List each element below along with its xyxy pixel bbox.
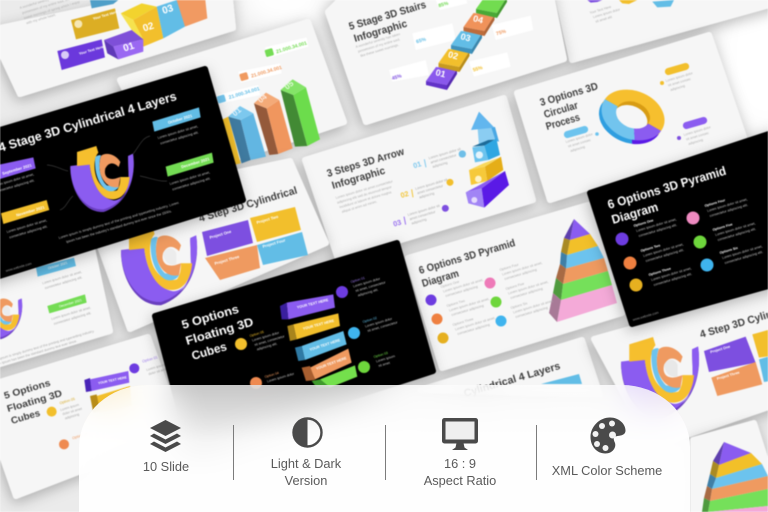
step markers: adipiscing	[411, 217, 427, 226]
options: Options Five	[712, 222, 733, 232]
title: Cubes	[190, 339, 229, 363]
chart value labels: 21.000.34.001	[228, 86, 261, 101]
title: Floating 3D	[6, 388, 64, 415]
cylinder graphic	[621, 337, 699, 418]
step markers: adipiscing	[419, 191, 435, 200]
description: Lorem ipsum dolor sit amet consectetur	[335, 179, 394, 200]
cylinder graphic	[0, 293, 22, 339]
options: Lorem ipsum dolor sit amet,	[636, 217, 677, 233]
label: Light & Dark Version: Version	[285, 473, 327, 488]
icon: palette	[590, 418, 626, 454]
options: Options One	[440, 280, 460, 289]
project boxes	[704, 329, 768, 396]
title	[325, 146, 406, 192]
cubes and options: YOUR TEXT HERE	[98, 375, 128, 385]
title: Circular	[542, 99, 579, 121]
option callouts: adipiscing	[670, 84, 686, 92]
cubes and options	[47, 355, 168, 449]
title: Infographic	[330, 165, 387, 192]
date labels: December 2021	[181, 156, 211, 169]
options: Lorem ipsum dolor sit amet,	[443, 278, 484, 293]
description: possession of my entire soul,	[358, 37, 401, 53]
project boxes: Project Three	[214, 254, 241, 266]
title: 6 Options 3D Pyramid	[606, 164, 728, 212]
options: Lorem ipsum dolor sit amet,	[455, 316, 496, 331]
date labels: Lorem ipsum dolor sit amet,	[42, 270, 82, 285]
bars: 01	[230, 105, 243, 118]
options: Lorem ipsum dolor sit amet,	[722, 244, 763, 260]
label: 16 : 9 Aspect Ratio: 16 : 9	[444, 456, 476, 471]
step markers: Lorem ipsum dolor sit	[407, 204, 440, 217]
date labels: October 2021	[47, 261, 68, 270]
options: consectetur adipiscing elit.	[638, 223, 678, 238]
stair blocks: 01	[122, 40, 136, 55]
stair blocks	[57, 0, 207, 70]
option markers: Lorem ipsum dolor	[267, 371, 295, 383]
date labels: November 2021	[16, 204, 46, 218]
cylinder graphic	[70, 146, 134, 212]
description: aliqua ut enim ad minim.	[341, 200, 378, 214]
step markers: Lorem ipsum dolor sit	[428, 147, 461, 160]
option markers: Option 02	[362, 316, 377, 324]
stair blocks: 03	[161, 3, 175, 17]
label: 10 Slide: 10 Slide	[143, 459, 189, 474]
slide: 3 steps 3D arrow infographic	[305, 98, 533, 259]
options: consectetur adipiscing	[504, 268, 537, 281]
options: Options Four	[704, 198, 726, 208]
step markers	[392, 147, 466, 229]
option callouts: sit amet consec	[668, 77, 692, 87]
slide: 4 step 3D cylindrical	[85, 161, 326, 329]
options: consectetur adipiscing elit.	[653, 272, 693, 287]
label: 16 : 9 Aspect Ratio: Aspect Ratio	[424, 473, 496, 488]
options: Lorem ipsum dolor sit amet,	[508, 280, 549, 295]
floating cubes: YOUR TEXT HERE	[303, 319, 335, 331]
title: Floating 3D	[184, 315, 255, 348]
stair labels: 65%	[416, 37, 427, 45]
title	[538, 80, 600, 133]
cylinder graphic	[121, 226, 197, 305]
options: Lorem ipsum dolor sit amet,	[707, 197, 748, 213]
project boxes: Project Three	[716, 371, 740, 381]
slide: left cylindrical light	[0, 230, 110, 370]
options: Options Six	[510, 301, 528, 310]
options: Options Four	[499, 262, 520, 272]
footer: www.website.com	[632, 310, 659, 322]
options: consectetur adipiscing	[457, 323, 490, 336]
icon: monitor	[442, 418, 478, 450]
options: Lorem ipsum dolor sit amet,	[715, 221, 756, 237]
slide: 5 stage 3D stair blocks	[0, 0, 233, 94]
stair steps: 02	[447, 49, 459, 62]
cubes and options: dolor sit amet	[148, 367, 168, 376]
options: Options Two	[446, 299, 465, 308]
icon: layers	[150, 420, 181, 452]
cubes and options: dolor sit amet	[62, 407, 82, 416]
title: 5 Options	[3, 378, 52, 402]
step markers: adipiscing	[432, 161, 448, 169]
date labels: consectetur adipiscing elit.	[44, 275, 83, 290]
divider	[385, 425, 386, 480]
step markers: amet consectetur	[430, 153, 458, 165]
title	[347, 0, 428, 45]
slide: 5 options floating 3D cubes light	[0, 337, 182, 496]
floating cubes: YOUR TEXT HERE	[316, 356, 348, 371]
options	[426, 256, 555, 344]
options: Options One	[633, 218, 654, 228]
step markers: amet consectetur	[417, 184, 444, 195]
body text: Lorem ipsum is simply dummy text of the printing and typesetting industry. Lorem	[58, 201, 179, 240]
title: 4 Stage 3D Cylindrical 4 Layers	[0, 89, 178, 155]
connectors	[47, 136, 167, 210]
option markers: Lorem ipsum dolor	[365, 316, 393, 328]
stair steps: 01	[434, 67, 447, 80]
option callouts: sit amet consec	[686, 131, 710, 141]
bars	[220, 79, 320, 165]
options: consectetur adipiscing elit.	[645, 248, 685, 263]
stair blocks: Your Text Here	[78, 45, 104, 56]
bars: 04	[256, 92, 269, 105]
project boxes	[202, 207, 308, 280]
option callouts: Lorem ipsum dolor	[565, 132, 594, 144]
cubes and options: Lorem ipsum	[146, 363, 166, 372]
option callouts: sit amet consec	[568, 138, 592, 148]
title: Cylindrical 4 Layers	[462, 360, 562, 400]
stair steps	[426, 0, 507, 90]
title: Process	[544, 111, 582, 133]
bars: 05	[283, 79, 296, 92]
option callouts	[563, 62, 715, 154]
dark slide: 6 options 3D pyramid diagram	[590, 127, 768, 324]
options: consectetur adipiscing elit.	[724, 250, 764, 265]
options: consectetur adipiscing	[510, 287, 543, 300]
label: Light & Dark Version: Light & Dark	[271, 456, 341, 471]
title: Infographic	[352, 18, 409, 45]
blue label	[541, 374, 582, 384]
pyramid	[549, 219, 617, 322]
label: XML Color Scheme: XML Color Scheme	[552, 463, 662, 478]
floating cubes: YOUR TEXT HERE	[297, 298, 329, 310]
description: A wonderful serenity has taken	[355, 32, 401, 49]
footer: www.website.com	[5, 261, 32, 273]
project boxes: Project Two	[256, 214, 279, 225]
arrow stack	[466, 112, 509, 208]
title: 4 Step 3D Cylindrical	[197, 185, 299, 225]
stair blocks: Your Text Here	[92, 10, 118, 21]
ring chart	[592, 81, 672, 153]
title: 6 Options 3D Pyramid	[417, 237, 517, 277]
project boxes: Project One	[710, 345, 731, 354]
stair blocks: 02	[142, 20, 156, 35]
date labels: September 2021	[2, 162, 33, 176]
stair labels: 55%	[472, 65, 484, 74]
option markers: Option 01	[350, 276, 365, 284]
body text: Lorem ipsum dolor sit amet,	[157, 124, 198, 140]
slide: 5 stage 3D stairs infographic	[328, 0, 564, 122]
title: Cubes	[10, 408, 42, 427]
option markers: adipiscing elit.	[357, 288, 379, 298]
options: Lorem ipsum dolor sit amet,	[643, 242, 684, 258]
option markers: sit amet, consectetur	[254, 334, 286, 347]
title	[417, 237, 517, 290]
step markers: 01	[412, 159, 422, 170]
floating cubes	[280, 294, 357, 388]
options: Options Five	[505, 282, 525, 291]
intro text: with my whole heart.	[26, 13, 57, 25]
option markers: adipiscing elit.	[256, 342, 278, 352]
options: Lorem ipsum dolor sit amet,	[513, 299, 554, 314]
dark slide: 4 stage 3D cylindrical 4 layers	[0, 69, 243, 282]
body text	[0, 124, 212, 246]
slide: cylindrical 4 layers light	[420, 340, 600, 400]
label: 16 : 9 Aspect Ratio	[424, 456, 496, 488]
option markers: sit amet, consectetur	[355, 280, 387, 293]
caption text: sit amet elit	[595, 15, 612, 24]
title: 3 Steps 3D Arrow	[325, 146, 406, 180]
date labels: Lorem ipsum dolor sit amet,	[51, 306, 91, 321]
date labels: December 2021	[58, 298, 82, 309]
title: 3 Options 3D	[538, 80, 600, 109]
description: incididunt ut labore et dolore magna	[339, 190, 392, 209]
stair labels: 75%	[496, 29, 507, 37]
step markers: 02	[399, 189, 410, 200]
option callouts: adipiscing	[570, 145, 586, 153]
date labels: October 2021	[167, 113, 194, 125]
options: consectetur adipiscing elit.	[709, 203, 749, 218]
option markers: Option 04	[264, 371, 279, 379]
date labels	[0, 107, 214, 224]
options: Options Two	[640, 243, 661, 253]
pyramid	[702, 442, 768, 512]
option markers	[235, 270, 399, 389]
slide: 6 options 3D pyramid diagram light	[408, 205, 622, 368]
options: Options Three	[648, 267, 671, 277]
option callouts: adipiscing	[688, 138, 704, 146]
chart value labels	[216, 37, 308, 104]
divider	[536, 425, 537, 480]
option markers: Lorem ipsum dolor	[353, 276, 381, 288]
cubes and options: adipiscing	[64, 412, 80, 420]
project boxes: Project Four	[262, 237, 286, 249]
dark slide: 5 options floating 3D cubes	[155, 243, 433, 450]
step markers: 03	[392, 218, 402, 229]
option markers: Lorem ipsum	[376, 354, 396, 363]
cubes and options: Option 01	[142, 355, 158, 364]
white glow top centre	[235, 0, 335, 30]
options: Options Six	[719, 246, 738, 255]
title: Diagram	[610, 200, 660, 227]
label: Light & Dark Version	[271, 456, 342, 488]
step markers: Lorem ipsum dolor sit	[415, 178, 448, 191]
option callouts: Lorem ipsum dolor	[665, 71, 694, 83]
body text: consectetur adipiscing elit.	[172, 176, 211, 191]
option markers: Option 03	[373, 351, 388, 359]
slide: 3 options 3D circular process	[517, 35, 744, 200]
intro text: sweet mornings of spring which I enjoy	[23, 0, 81, 20]
caption text: Lorem ipsum dolor	[592, 7, 621, 19]
project boxes: Project One	[209, 229, 233, 240]
options: Lorem ipsum dolor sit amet,	[651, 266, 692, 282]
options: consectetur adipiscing	[451, 304, 484, 317]
date labels	[0, 258, 96, 368]
feature panel	[79, 385, 690, 512]
slide: 3D bar chart	[120, 22, 344, 180]
options: Options Three	[452, 317, 474, 327]
options: consectetur adipiscing elit.	[717, 227, 757, 242]
option markers: sit amet	[378, 361, 390, 368]
body text: Lorem ipsum dolor sit amet,	[6, 218, 47, 234]
chart value labels: 21.000.34.001	[251, 65, 283, 80]
slide: top right partial	[554, 0, 768, 60]
stair steps: 04	[472, 13, 484, 26]
option callouts: Lorem ipsum dolor	[683, 125, 712, 137]
body text: Lorem ipsum dolor sit amet,	[169, 170, 210, 186]
cubes and options: Option 04	[72, 432, 88, 440]
option markers: sit amet, consectetur	[367, 320, 399, 333]
title	[180, 302, 255, 363]
body text: Ipsum has been the industry's standard dummy text ever since the 1500s.	[66, 209, 172, 244]
cubes and options: Lorem ipsum	[60, 403, 80, 412]
description: like these sweet mornings.	[360, 43, 399, 58]
stair steps: 03	[459, 31, 472, 44]
stair labels	[389, 0, 533, 82]
white glow top right	[710, 0, 768, 140]
slide: pyramid bottom right	[693, 423, 768, 512]
stair labels: 45%	[391, 73, 403, 82]
floating cubes: YOUR TEXT HERE	[309, 338, 341, 352]
options	[616, 192, 765, 292]
options: Lorem ipsum dolor sit amet,	[449, 297, 490, 312]
options: consectetur adipiscing	[515, 306, 548, 319]
options: consectetur adipiscing	[445, 285, 478, 298]
option markers: Lorem ipsum dolor	[252, 330, 280, 342]
stair labels: 85%	[438, 1, 450, 9]
description: adipiscing elit sed do eiusmod tempor	[337, 185, 393, 205]
chart value labels: 21.000.34.001	[276, 40, 308, 55]
option markers: Option 05	[249, 330, 264, 338]
title: Diagram	[420, 268, 460, 290]
cubes and options: Option 05	[59, 397, 75, 405]
body text: consectetur adipiscing elit.	[9, 224, 48, 239]
slide: 4 step 3D cylindrical right	[594, 287, 768, 447]
title: 5 Options	[180, 302, 241, 332]
date labels: consectetur adipiscing elit.	[53, 311, 92, 326]
step markers: amet consectetur	[409, 210, 437, 221]
body text: consectetur adipiscing elit.	[160, 130, 199, 145]
icon: light and dark contrast	[292, 417, 323, 448]
options: Lorem ipsum dolor sit amet,	[502, 261, 543, 276]
title	[3, 378, 64, 427]
divider	[233, 425, 234, 480]
caption text: Your Text Here	[589, 5, 612, 15]
